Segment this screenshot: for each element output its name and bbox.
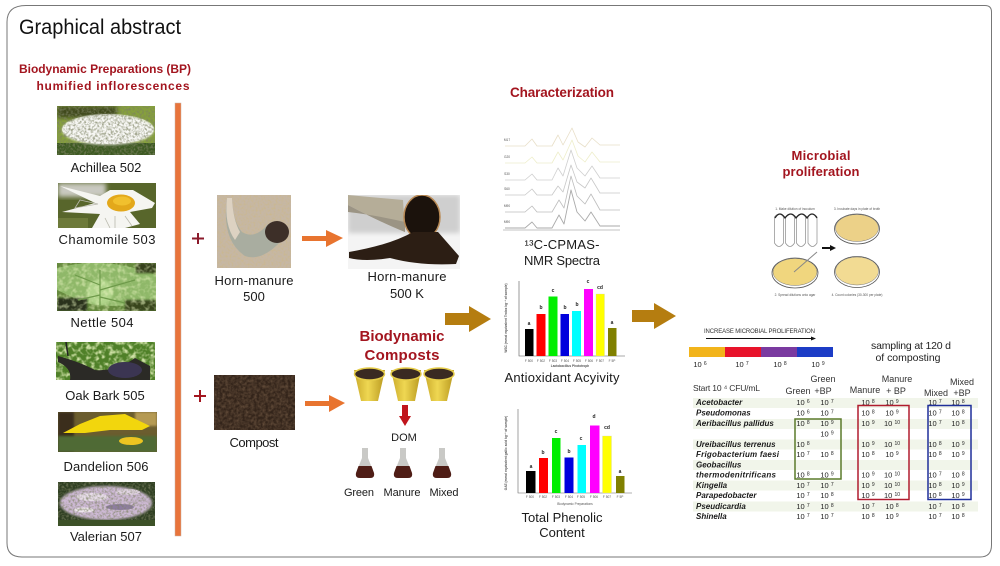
table: microbial counts: 10 — [796, 481, 805, 490]
flask labels: Manure — [384, 487, 420, 499]
table: microbial counts: Parapedobacter — [696, 491, 757, 500]
bar chart: total phenolic content: cd — [604, 425, 610, 431]
table: microbial counts: 7 — [807, 482, 810, 488]
bar chart: total phenolic content: b — [541, 450, 545, 456]
table: microbial counts: 10 — [820, 470, 829, 480]
bar chart: antioxidant activity: F 507 — [596, 359, 604, 363]
bar chart: total phenolic content: a — [530, 464, 533, 470]
table: microbial counts: 8 — [939, 482, 942, 488]
table: microbial counts: 8 — [896, 503, 899, 509]
table: microbial counts: 10 — [861, 419, 870, 428]
heading: characterization: Characterization — [510, 85, 614, 100]
plus sign: compost — [194, 390, 206, 402]
table: microbial counts: 10 — [884, 440, 892, 449]
table: microbial counts: 7 — [831, 513, 834, 519]
label: total phenolic content: Total Phenolic — [522, 510, 603, 525]
table: microbial counts: 8 — [831, 451, 834, 457]
table: microbial counts: 10 — [796, 419, 805, 428]
legend: proliferation scale: 6 — [704, 361, 707, 367]
table: microbial counts: 10 — [928, 512, 937, 521]
bar chart: antioxidant activity: F 506 — [585, 359, 593, 363]
photo: compost — [214, 375, 295, 430]
bar chart: antioxidant activity: c — [552, 288, 555, 294]
bar chart: total phenolic content: b — [567, 449, 571, 455]
table: microbial counts: 10 — [796, 502, 805, 511]
table: microbial counts: 8 — [872, 513, 875, 519]
table: microbial counts: 10 — [820, 430, 829, 438]
table: microbial counts: 8 — [939, 441, 942, 447]
NMR spectra chart: M90 — [504, 204, 510, 208]
table: microbial counts: +BP — [814, 386, 832, 396]
bar chart: total phenolic content: F 500 — [526, 495, 534, 499]
label: sampling note: sampling at 120 d — [871, 340, 951, 352]
table: microbial counts: 10 — [861, 491, 870, 500]
table: microbial counts: 10 — [894, 420, 900, 426]
table: microbial counts: 10 — [884, 419, 892, 428]
table: microbial counts: 10 — [951, 491, 960, 500]
table: microbial counts: Pseudicardia — [696, 502, 746, 511]
table: microbial counts: 9 — [896, 399, 899, 405]
label: horn-manure 500 K: Horn-manure — [368, 269, 446, 284]
bar chart: total phenolic content: F 504 — [565, 495, 573, 499]
label: nettle: Nettle 504 — [70, 315, 134, 330]
bar chart: total phenolic content: F 507 — [603, 495, 611, 499]
photo: chamomile — [58, 183, 156, 228]
table: microbial counts: 10 — [861, 481, 870, 490]
table: microbial counts: 7 — [939, 420, 942, 426]
label: sampling note line 2: of composting — [876, 352, 941, 364]
table: microbial counts: 10 — [894, 492, 900, 498]
NMR spectra chart: G20 — [504, 155, 510, 159]
label: horn-manure 500: Horn-manure — [214, 273, 294, 288]
photo: oak bark — [56, 342, 155, 380]
table: microbial counts: 8 — [807, 420, 810, 426]
table: microbial counts: Ureibacillus terrenus — [696, 440, 776, 449]
table: microbial counts: 10 — [796, 470, 805, 480]
legend: proliferation scale: INCREASE MICROBIAL PROLIFERATION — [704, 329, 815, 335]
table: microbial counts: 10 — [796, 512, 805, 521]
table: microbial counts: Pseudomonas — [696, 408, 751, 418]
label: 500 K: 500 K — [390, 286, 424, 301]
table: microbial counts: 10 — [820, 491, 829, 500]
table: microbial counts: 7 — [831, 410, 834, 416]
table: microbial counts — [693, 374, 978, 521]
diagram: plating procedure: 4. Count colonies (30-300 per plate) — [832, 293, 882, 297]
flask labels — [344, 487, 458, 499]
bar chart: antioxidant activity: F 505 — [573, 359, 581, 363]
table: microbial counts: 10 — [861, 408, 870, 418]
table: microbial counts: 7 — [807, 513, 810, 519]
table: microbial counts: 9 — [962, 451, 965, 457]
arrow: composts to characterization — [445, 306, 491, 332]
arrow: compost to pots — [305, 395, 345, 412]
table: microbial counts: 8 — [939, 492, 942, 498]
table: microbial counts: 9 — [962, 441, 965, 447]
table: microbial counts: 10 — [861, 470, 870, 480]
table: microbial counts: 10 — [820, 502, 829, 511]
heading: biodynamic composts: Composts — [364, 347, 440, 364]
table: microbial counts: Mixed — [924, 388, 948, 398]
table: microbial counts: 7 — [831, 399, 834, 405]
table: microbial counts: 10 — [928, 481, 937, 490]
table: microbial counts: 10 — [928, 398, 937, 407]
legend: proliferation scale: 7 — [746, 361, 749, 367]
orange vertical bar — [175, 103, 181, 536]
table: microbial counts: 7 — [807, 492, 810, 498]
table: microbial counts: 10 — [894, 472, 900, 478]
table: microbial counts: thermodenitrificans — [696, 470, 777, 480]
table: microbial counts: 10 — [928, 450, 937, 459]
table: microbial counts: 8 — [831, 492, 834, 498]
table: microbial counts: 10 — [951, 502, 960, 511]
bar chart: total phenolic content: c — [580, 436, 583, 442]
legend: proliferation scale: 10 — [735, 360, 744, 369]
label: dandelion: Dandelion 506 — [64, 459, 148, 474]
bar chart: total phenolic content: F 506 — [590, 495, 598, 499]
table: microbial counts: Geobacillus — [696, 460, 742, 470]
photo: horn-manure 500 K — [348, 195, 460, 269]
table: microbial counts: 7 — [807, 451, 810, 457]
bar chart: antioxidant activity: b — [563, 305, 567, 311]
NMR spectra chart: M17 — [504, 138, 510, 142]
bar chart: antioxidant activity: F 502 — [537, 359, 545, 363]
bar chart: antioxidant activity: F 5P — [609, 359, 615, 363]
table: microbial counts: 10 — [820, 398, 829, 407]
table: microbial counts: Mixed — [950, 377, 974, 387]
table: microbial counts: 8 — [962, 420, 965, 426]
table: microbial counts: 8 — [872, 399, 875, 405]
table: microbial counts: 8 — [831, 503, 834, 509]
arrow: pots to DOM — [399, 405, 411, 426]
label: chamomile: Chamomile 503 — [58, 232, 156, 247]
arrow: horn to horn K — [302, 230, 343, 247]
table: microbial counts: Kingella — [696, 481, 728, 490]
table: microbial counts: 10 — [951, 419, 960, 428]
label: 500: 500 — [243, 289, 265, 304]
table: microbial counts: 10 — [928, 502, 937, 511]
table: microbial counts: 10 — [951, 512, 960, 521]
pots — [354, 368, 454, 401]
table: microbial counts: 10 — [861, 502, 870, 511]
label: antioxidant activity: Antioxidant Acyivity — [504, 370, 620, 385]
table: microbial counts: Green — [810, 374, 836, 384]
bar chart: antioxidant activity: a — [611, 320, 614, 326]
photo: valerian — [58, 482, 155, 526]
diagram: plating procedure: 3. Incubate days in plate of broth — [834, 207, 880, 211]
table: microbial counts: 10 — [951, 470, 960, 480]
table: microbial counts: 10 — [928, 470, 937, 480]
bar chart: antioxidant activity: F 500 — [525, 359, 533, 363]
table: microbial counts: 9 — [896, 410, 899, 416]
bar chart: antioxidant activity: b — [539, 305, 543, 311]
legend: proliferation scale: 10 — [811, 360, 820, 369]
table: microbial counts: 9 — [872, 441, 875, 447]
bar chart: total phenolic content: F 503 — [552, 495, 560, 499]
table: microbial counts: 10 — [951, 450, 960, 459]
heading: biodynamic composts: Biodynamic — [360, 328, 444, 345]
label: NMR spectra line 2: NMR Spectra — [524, 253, 601, 268]
table: microbial counts: 7 — [939, 513, 942, 519]
table: microbial counts: 10 — [928, 440, 937, 449]
table: microbial counts: 10 — [894, 441, 900, 447]
table: microbial counts: +BP — [953, 388, 971, 398]
table: microbial counts: 10 — [951, 408, 960, 418]
label: oak bark: Oak Bark 505 — [65, 388, 145, 403]
table: microbial counts: 7 — [872, 503, 875, 509]
table: microbial counts: 9 — [896, 513, 899, 519]
table: microbial counts: 8 — [962, 503, 965, 509]
heading: biodynamic preparations: humified inflorescences — [36, 79, 190, 93]
table: microbial counts: 8 — [939, 451, 942, 457]
table: microbial counts: 7 — [807, 503, 810, 509]
table: microbial counts: 7 — [831, 482, 834, 488]
table: microbial counts: 10 — [820, 408, 829, 418]
bar chart: total phenolic content: F 502 — [539, 495, 547, 499]
bar chart: total phenolic content: GAE (mmol equivalent gallic acid kg⁻¹ of sample) — [504, 416, 508, 490]
table: microbial counts: Shinella — [696, 512, 727, 521]
table: microbial counts: 10 — [885, 398, 894, 407]
table: microbial counts: 9 — [831, 430, 834, 436]
bar chart: total phenolic content: d — [592, 414, 596, 420]
table: microbial counts: 10 — [796, 408, 805, 418]
diagram: plating procedure: 2. Spread dilutions onto agar — [775, 293, 816, 297]
label: DOM: DOM — [391, 432, 417, 444]
table: microbial counts: 10 — [820, 419, 829, 428]
photo: dandelion — [58, 412, 157, 452]
table: microbial counts: 8 — [807, 441, 810, 447]
heading: biodynamic preparations: Biodynamic Preparations (BP) — [19, 62, 191, 76]
bar chart: antioxidant activity: b — [575, 302, 579, 308]
table: microbial counts: 9 — [896, 451, 899, 457]
table: microbial counts: 6 — [807, 399, 810, 405]
table: microbial counts: 7 — [939, 472, 942, 478]
photo: achillea — [57, 106, 155, 155]
bar chart: antioxidant activity: Lactobacillus Phototroph — [551, 364, 589, 368]
legend: proliferation scale: 8 — [784, 361, 787, 367]
diagram: plating procedure — [772, 207, 882, 297]
table: microbial counts: 10 — [820, 512, 829, 521]
bar chart: antioxidant activity: c — [587, 279, 590, 285]
legend: proliferation scale: 10 — [693, 360, 702, 369]
legend: proliferation scale: 9 — [822, 361, 825, 367]
bar chart: total phenolic content — [504, 409, 632, 506]
title: Graphical abstract — [19, 16, 181, 39]
table: microbial counts: 10 — [951, 440, 960, 449]
bar chart: antioxidant activity: a — [528, 321, 531, 327]
table: microbial counts: Aeribacillus pallidus — [695, 419, 774, 428]
table: microbial counts: 9 — [962, 492, 965, 498]
table: microbial counts: 8 — [962, 410, 965, 416]
photo: horn-manure 500 — [217, 195, 291, 268]
table: microbial counts: 10 — [885, 450, 894, 459]
table: microbial counts: 8 — [872, 410, 875, 416]
table: microbial counts: 10 — [796, 491, 805, 500]
bar chart: total phenolic content: c — [555, 429, 558, 435]
table: microbial counts: 10 — [796, 440, 805, 449]
flasks — [356, 448, 451, 478]
label: compost: Compost — [230, 435, 279, 450]
bar chart: antioxidant activity: F 504 — [561, 359, 569, 363]
table: microbial counts: 8 — [962, 513, 965, 519]
label: valerian: Valerian 507 — [70, 529, 142, 544]
heading: microbial proliferation: proliferation — [782, 164, 860, 179]
bar chart: total phenolic content: F 505 — [577, 495, 585, 499]
table: microbial counts: 10 — [820, 481, 829, 490]
table: microbial counts: Manure — [850, 385, 880, 395]
table: microbial counts: 10 — [861, 398, 870, 407]
table: microbial counts: 9 — [831, 472, 834, 478]
heading: microbial proliferation: Microbial — [792, 148, 850, 163]
bar chart: antioxidant activity: cd — [597, 285, 603, 291]
NMR spectra chart: M90 — [504, 220, 510, 224]
table: microbial counts: 7 — [939, 410, 942, 416]
table: microbial counts: 10 — [894, 482, 900, 488]
table: microbial counts: 9 — [962, 482, 965, 488]
table: microbial counts: 9 — [872, 420, 875, 426]
bar chart: antioxidant activity — [504, 279, 625, 368]
NMR spectra chart: S30 — [504, 172, 510, 176]
table: microbial counts: 9 — [831, 420, 834, 426]
bar chart: antioxidant activity: WSC (mmol equivalent Trolox kg⁻¹ of sample) — [504, 283, 508, 353]
table: microbial counts: 6 — [807, 410, 810, 416]
table: microbial counts: 10 — [820, 450, 829, 459]
table: microbial counts: 10 — [861, 512, 870, 521]
legend: proliferation scale — [689, 329, 833, 369]
table: microbial counts: Frigobacterium faesi — [696, 450, 780, 459]
table: microbial counts: 10 — [884, 491, 892, 500]
table: microbial counts: 9 — [872, 482, 875, 488]
label: content line 2: Content — [539, 525, 585, 540]
table: microbial counts: + BP — [886, 386, 906, 396]
table: microbial counts: 10 — [928, 408, 937, 418]
table: microbial counts: 10 — [885, 502, 894, 511]
table: microbial counts: 10 — [861, 450, 870, 459]
table: microbial counts: 9 — [872, 472, 875, 478]
table: microbial counts: 8 — [807, 472, 810, 478]
NMR spectra chart — [503, 128, 620, 230]
diagram: plating procedure: 1. Make dilution of inoculum — [775, 207, 815, 211]
table: microbial counts: 10 — [885, 408, 894, 418]
table: microbial counts: 10 — [928, 491, 937, 500]
table: microbial counts: 10 — [951, 481, 960, 490]
table: microbial counts: Start 10 ⁴ CFU/mL — [693, 383, 760, 393]
table: microbial counts: 10 — [796, 398, 805, 407]
photo: nettle — [57, 263, 156, 311]
flask labels: Green — [344, 487, 374, 499]
table: microbial counts: 10 — [885, 512, 894, 521]
arrow: characterization to microbial — [632, 303, 676, 329]
label: achillea: Achillea 502 — [71, 160, 141, 175]
NMR spectra chart: S60 — [504, 187, 510, 191]
table: microbial counts: 9 — [872, 492, 875, 498]
table: microbial counts: Green — [785, 386, 811, 396]
table: microbial counts: Manure — [882, 374, 912, 384]
table: microbial counts: 7 — [939, 399, 942, 405]
bar chart: total phenolic content: a — [619, 469, 622, 475]
table: microbial counts: 10 — [796, 450, 805, 459]
table: microbial counts: 10 — [861, 440, 870, 449]
table: microbial counts: Acetobacter — [695, 398, 743, 407]
label: NMR spectra: ¹³C-CPMAS- — [524, 237, 600, 252]
flask labels: Mixed — [430, 487, 458, 499]
table: microbial counts: 10 — [884, 470, 892, 480]
bar chart: total phenolic content: Biodynamic Preparations — [557, 502, 593, 506]
table: microbial counts: 8 — [872, 451, 875, 457]
table: microbial counts: 10 — [928, 419, 937, 428]
table: microbial counts: 8 — [962, 399, 965, 405]
table: microbial counts: 8 — [962, 472, 965, 478]
table: microbial counts: 7 — [939, 503, 942, 509]
table: microbial counts: 10 — [884, 481, 892, 490]
table: microbial counts: 10 — [951, 398, 960, 407]
legend: proliferation scale: 10 — [773, 360, 782, 369]
plus sign: horn manure — [192, 233, 204, 244]
bar chart: antioxidant activity: F 503 — [549, 359, 557, 363]
bar chart: total phenolic content: F 5P — [617, 495, 623, 499]
